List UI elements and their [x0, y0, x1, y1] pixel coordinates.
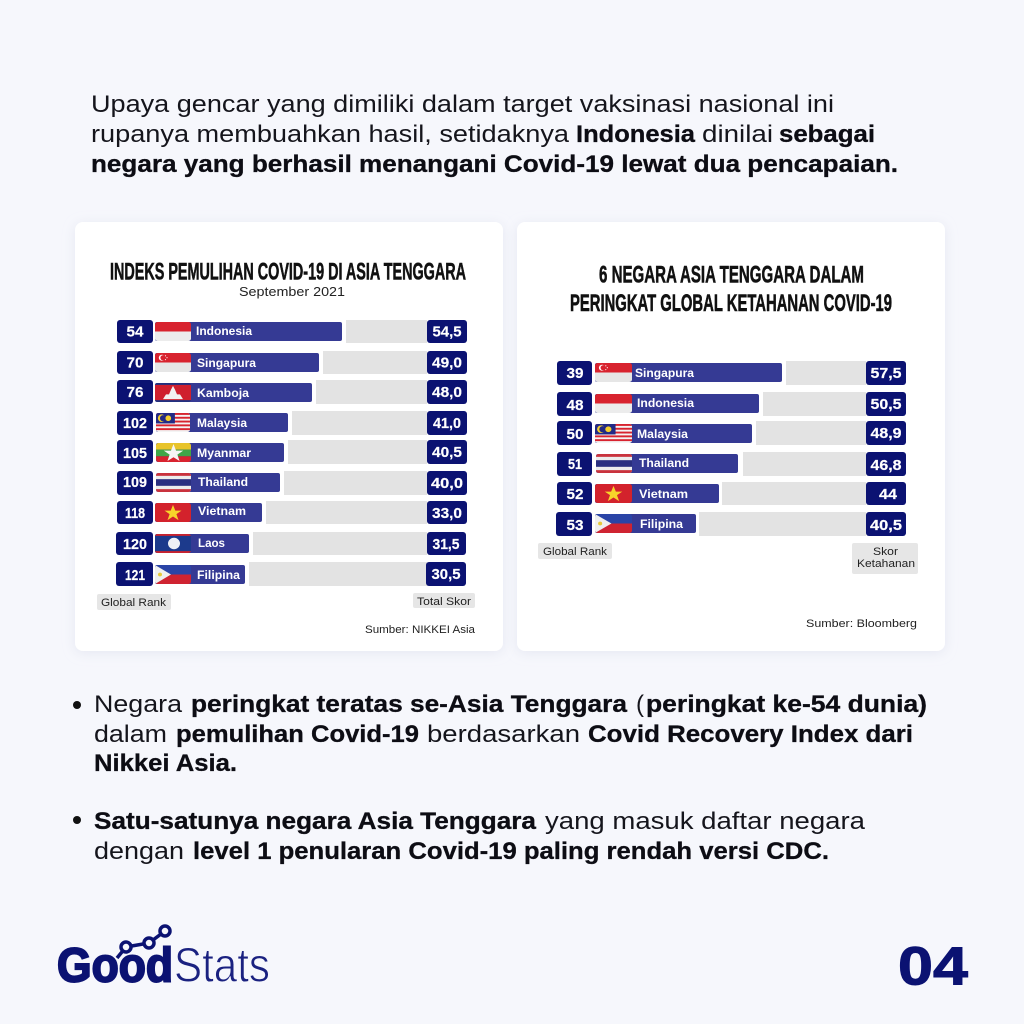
legend: skor ketahanan: Skor: [873, 546, 898, 558]
bullet: CDC level 1: [73, 808, 866, 865]
row: Vietnam: 118: [125, 505, 145, 522]
row: Kamboja: Kamboja: [197, 386, 249, 400]
row: Singapura: [557, 361, 906, 385]
row: Thailand: Thailand: [639, 456, 689, 470]
row: Laos: Laos: [198, 536, 225, 550]
row: Vietnam: Vietnam: [639, 487, 688, 501]
legend: total skor: Total Skor: [417, 596, 471, 608]
row: Singapura: [117, 351, 467, 374]
row: Vietnam: [557, 482, 906, 505]
row: Kamboja: [117, 380, 467, 404]
row: Malaysia: 48,9: [870, 425, 902, 442]
legend: global rank: [97, 594, 171, 610]
row: Indonesia: 48: [566, 397, 584, 414]
row: Indonesia: 50,5: [870, 396, 902, 413]
row: Singapura: 39: [566, 365, 584, 382]
row: Laos: 31,5: [432, 536, 460, 553]
row: Thailand: [557, 452, 906, 476]
bullet: recovery index ranking: pemulihan Covid-19: [176, 721, 419, 748]
row: Malaysia: 50: [566, 426, 584, 443]
bullet: CDC level 1: yang masuk daftar negara: [545, 808, 866, 835]
row: Malaysia: 102: [123, 415, 147, 432]
row: Thailand: [117, 471, 467, 495]
row: Vietnam: Vietnam: [198, 504, 246, 518]
row: Filipina: 30,5: [432, 566, 460, 583]
bullet: CDC level 1: dengan: [94, 838, 184, 865]
row: Indonesia: 54,5: [432, 324, 462, 340]
legend: skor ketahanan: [852, 543, 918, 574]
row: Kamboja: 48,0: [432, 384, 462, 401]
row: Myanmar: 105: [123, 445, 147, 462]
bullet: CDC level 1: Satu-satunya negara Asia Tenggara: [94, 808, 537, 835]
row: Indonesia: 54: [126, 324, 144, 340]
intro paragraph: sebagai: [779, 121, 875, 148]
logo: GoodStats: [57, 926, 270, 992]
row: Thailand: Thailand: [198, 475, 248, 489]
chart title: 6 NEGARA ASIA TENGGARA DALAM: [599, 262, 864, 288]
bullet: recovery index ranking: (: [636, 691, 644, 718]
intro paragraph: negara yang berhasil menangani Covid-19 lewat dua pencapaian.: [91, 151, 898, 178]
row: Filipina: 121: [125, 567, 145, 584]
row: Filipina: Filipina: [197, 568, 240, 582]
source note: Sumber: NIKKEI Asia: [365, 624, 476, 636]
row: Filipina: 40,5: [870, 517, 902, 534]
row: Indonesia: [117, 320, 467, 343]
row: Singapura: Singapura: [197, 356, 256, 370]
row: Thailand: 40,0: [431, 475, 463, 492]
page number: 04: [898, 936, 968, 996]
row: Malaysia: [557, 421, 906, 445]
source note: Sumber: Bloomberg: [806, 618, 917, 630]
row: Thailand: 46,8: [870, 457, 902, 474]
bullet: recovery index ranking: [73, 691, 927, 777]
row: Kamboja: 76: [126, 384, 144, 401]
row: Malaysia: [117, 411, 467, 435]
bullet: recovery index ranking: berdasarkan: [427, 721, 580, 748]
bullet: recovery index ranking: Negara: [94, 691, 183, 718]
intro paragraph: Indonesia: [576, 121, 696, 148]
row: Thailand: 109: [123, 474, 147, 491]
row: Filipina: [116, 562, 466, 586]
row: Malaysia: Malaysia: [197, 416, 247, 430]
bullet: CDC level 1: level 1 penularan Covid-19 paling rendah versi CDC.: [193, 838, 829, 865]
bullet: recovery index ranking: Covid Recovery Index dari: [588, 721, 913, 748]
bullet: recovery index ranking: dalam: [94, 721, 167, 748]
row: Singapura: 49,0: [432, 354, 462, 372]
row: Vietnam: 33,0: [432, 505, 462, 522]
row: Singapura: 57,5: [870, 365, 902, 382]
panel: recovery index: [75, 222, 503, 651]
row: Myanmar: [117, 440, 467, 464]
chart title: [570, 262, 892, 317]
row: Vietnam: [117, 501, 467, 524]
row: Singapura: 70: [126, 354, 144, 372]
bullet: recovery index ranking: peringkat ke-54 dunia): [646, 691, 927, 718]
chart title: INDEKS PEMULIHAN COVID-19 DI ASIA TENGGARA: [110, 258, 466, 286]
intro paragraph: rupanya membuahkan hasil, setidaknya: [91, 121, 570, 148]
row: Filipina: [556, 512, 906, 536]
row: Myanmar: 40,5: [432, 444, 462, 461]
row: Malaysia: Malaysia: [637, 427, 688, 441]
row: Indonesia: Indonesia: [637, 396, 694, 410]
legend: global rank: Global Rank: [543, 546, 608, 558]
chart subtitle: September 2021: [239, 284, 345, 299]
row: Thailand: 51: [568, 456, 582, 473]
row: Filipina: 53: [566, 517, 584, 534]
row: Laos: [116, 532, 466, 555]
row: Myanmar: Myanmar: [197, 446, 251, 460]
row: Vietnam: 44: [879, 486, 898, 503]
row: Laos: 120: [123, 536, 147, 553]
intro paragraph: [91, 91, 898, 178]
row: Vietnam: 52: [566, 486, 584, 503]
legend: global rank: Global Rank: [101, 597, 167, 609]
panel: resilience ranking: [517, 222, 945, 651]
row: Indonesia: [557, 392, 906, 416]
legend: global rank: [538, 543, 612, 559]
logo: GoodStats: Stats: [174, 940, 270, 992]
legend: skor ketahanan: Ketahanan: [857, 558, 915, 570]
row: Singapura: Singapura: [635, 366, 694, 380]
row: Malaysia: 41,0: [433, 415, 461, 432]
logo: GoodStats: Good: [57, 940, 173, 992]
intro paragraph: dinilai: [702, 121, 773, 148]
intro paragraph: Upaya gencar yang dimiliki dalam target vaksinasi nasional ini: [91, 91, 834, 118]
row: Filipina: Filipina: [640, 517, 683, 531]
legend: total skor: [413, 593, 475, 608]
bullet: recovery index ranking: peringkat teratas se-Asia Tenggara: [191, 691, 628, 718]
row: Indonesia: Indonesia: [196, 324, 252, 338]
bullet: recovery index ranking: Nikkei Asia.: [94, 750, 237, 777]
